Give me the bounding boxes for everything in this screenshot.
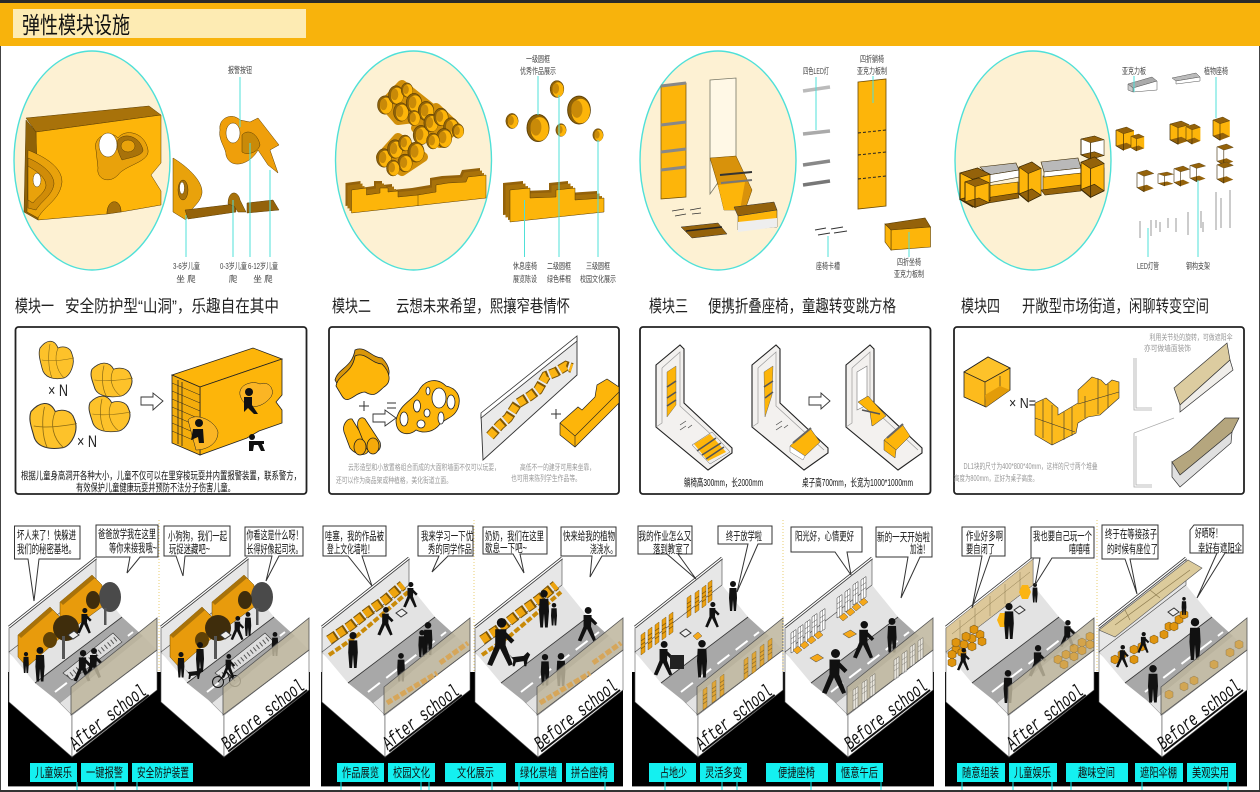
label: Before school: Before school: [840, 676, 932, 755]
panel: module four explanation: [954, 327, 1244, 494]
panel: module two exploded illustration: [336, 51, 616, 284]
tags: module three: [649, 763, 883, 782]
text block: 也可用来陈列学生作品等。: [511, 473, 581, 483]
cyan leader lines: [186, 77, 270, 257]
panel: module one explanation: [16, 327, 306, 494]
callout: 阳光好: [791, 527, 862, 575]
icon: separated cubes: [1116, 117, 1233, 192]
callout: 奶奶: 歇息一下吧~: [485, 541, 527, 555]
arrow: [809, 393, 830, 409]
icon: separated bench: [503, 181, 604, 222]
text: times N equals: × N=: [1009, 395, 1036, 412]
header band: [0, 3, 1260, 46]
icon: separated rings: [506, 81, 603, 142]
labels: 四色LED灯: [803, 66, 829, 76]
icon: cloud piece: [335, 349, 389, 400]
cyan leader lines: [1134, 76, 1216, 257]
labels: age groups: 坐 爬: [253, 274, 273, 284]
icon: folded table and chair: [846, 345, 922, 470]
callout: 好晒呀: [1190, 525, 1243, 598]
tags: module four: [957, 763, 1236, 782]
icon: folding seat raised: [672, 78, 777, 238]
tags: module one: 安全防护装置: [137, 765, 189, 780]
labels: 二级圆框: [547, 261, 571, 271]
callout: 小狗狗: 玩捉迷藏吧~: [169, 542, 210, 556]
callout: 坏人来了: 我们的秘密基地。: [17, 542, 76, 556]
callout: 作业好多: 作业好多啊: [966, 529, 1003, 543]
callout: 终于放学: 终于放学啦: [726, 529, 762, 543]
callout: 我也要玩: 我也要自己玩一个: [1033, 530, 1092, 543]
tags: module two: 作品展览: [342, 765, 379, 780]
icon: module pieces times N: [30, 341, 133, 451]
labels: LED灯管: [1137, 261, 1159, 271]
callout: 我也要玩: [1031, 527, 1094, 585]
callout: 爸爸放学: 爸爸放学我在这里: [98, 527, 156, 541]
label: Before school: Before school: [530, 676, 622, 755]
heading: module three: [649, 297, 896, 316]
black ground: group two: [321, 672, 623, 786]
heading: module one: 模块一: [15, 297, 54, 316]
text block: 有效保护儿童健康玩耍并预防不法分子伤害儿童。: [76, 481, 235, 494]
labels: 休息座椅: [513, 261, 537, 271]
icon: cave wall block: [24, 106, 161, 220]
callout: 小狗狗: [164, 526, 230, 576]
icon: stepped bench wall: [346, 168, 486, 213]
labels: 三级圆框: [586, 261, 610, 271]
text block: 根据儿童身高洞开各种大小，儿童不仅可以在里穿梭玩耍并内置报警装置，联系警方，: [21, 469, 301, 482]
tags: module two: 绿化景墙: [520, 765, 557, 780]
icon: cylinders: [344, 418, 381, 455]
callout: 快来给植物: 浇浇水。: [590, 543, 617, 556]
callout: 终于有座位: [1102, 525, 1158, 594]
icon: assembled cave wall with children: [172, 348, 282, 455]
labels: age groups: 爬: [229, 274, 238, 284]
tags: module one: [30, 763, 193, 782]
labels: 展览陈设: [513, 274, 537, 284]
icon: LED bars: [803, 87, 830, 185]
callout: 奶奶: [483, 527, 547, 573]
callout: 作业落到教室: 落到教室了: [653, 542, 690, 556]
callout: 哇塞: 哇塞，我的作品被: [325, 529, 384, 543]
icon: plus: [359, 401, 369, 411]
labels: 钢构支架: [1186, 261, 1210, 271]
bottom gray lines under black ground: [8, 786, 1247, 788]
callout: 爸爸放学: [96, 525, 158, 573]
text block: 桌子高700mm，长宽为1000*1000mm: [802, 476, 913, 489]
title: 弹性模块设施: [22, 12, 130, 38]
top edge bar: [0, 0, 1260, 3]
panel: module three exploded illustration: [640, 51, 930, 279]
icon: cube unit: [964, 357, 1010, 407]
labels: age groups: 0-3岁儿童: [220, 261, 247, 271]
panel: module one exploded illustration: [14, 51, 279, 284]
callout: 奶奶: 奶奶，我们在这里: [485, 529, 544, 543]
text block: 躺椅高300mm，长2000mm: [684, 476, 763, 489]
labels: 四折躺椅: [860, 54, 884, 64]
label: Before school: Before school: [217, 676, 309, 755]
label: After school: After school: [65, 681, 151, 755]
text block: rotating joint: [1144, 332, 1232, 353]
tags: module three: 惬意午后: [841, 765, 878, 780]
panel: module three explanation: [640, 327, 930, 494]
tags: module four: 遮阳伞棚: [1140, 765, 1177, 780]
arrow: [141, 393, 163, 410]
tags: module four: 美观实用: [1192, 765, 1229, 780]
icon: ring clusters: [377, 83, 464, 176]
labels: 校园文化展示: [580, 274, 616, 284]
icon: table half folded: [752, 345, 828, 470]
heading: module two: [332, 296, 570, 316]
label: After school: After school: [1002, 681, 1088, 755]
cyan leader lines: [524, 76, 598, 257]
tags: module four: 儿童娱乐: [1014, 765, 1051, 780]
icon: market stall frames: [960, 136, 1104, 207]
tags: module two: [337, 763, 614, 782]
icon: steel posts and LED tubes: [1140, 190, 1230, 238]
scene: module one before school: [161, 558, 309, 757]
tags: module two: 校园文化: [393, 765, 430, 780]
scene: module two after school: [322, 558, 470, 757]
black ground: group three: [632, 672, 934, 786]
text block: 高低不一的建牙可用来坐靠，: [520, 462, 595, 472]
callout: 你看这是什么: 你看这是什么呀！: [246, 528, 302, 542]
callout: 作业落到教室: [638, 526, 696, 579]
callout: 哇塞: 登上文化墙啦！: [327, 542, 374, 556]
tags: module three: 灵活多变: [705, 765, 742, 780]
heading: module three: 模块三: [649, 297, 688, 316]
labels: 亚克力板: [1122, 66, 1146, 76]
text block: 还可以作为商品架或种植格，美化街道立面。: [336, 475, 452, 485]
icon: four fold acrylic panel: [858, 79, 886, 209]
labels: age groups: 3-6岁儿童: [173, 261, 200, 271]
heading: module four: 开敞型市场街道，闲聊转变空间: [1022, 297, 1209, 316]
callout: 阳光好: 阳光好，心情更好: [795, 529, 854, 543]
label: After school: After school: [378, 681, 464, 755]
callout: 你看这是什么: [245, 527, 303, 581]
labels: 座椅卡槽: [816, 261, 840, 271]
scene: module one after school: [9, 558, 157, 757]
icon: acrylic parts: [1128, 73, 1200, 92]
tags: module four: 随意组装: [962, 765, 999, 780]
callout: 你看这是什么: 长得好像起司块。: [246, 542, 302, 556]
icon: module pieces times N: × N: [77, 432, 97, 451]
callout: 快来给植物: 快来给我的植物: [563, 529, 615, 543]
labels: [513, 54, 616, 284]
heading: module four: [961, 297, 1209, 316]
text block: dimensions: DL1块的尺寸为400*800*40mm，这样的尺寸两个堆叠: [964, 461, 1098, 471]
icon: folding seat unfolded: [661, 83, 686, 199]
callout: 终于放学: [718, 526, 772, 592]
callout: 作业好多: [962, 527, 1005, 608]
callout: 快来给植物: [561, 527, 617, 577]
panel: module four exploded illustration: [955, 51, 1233, 271]
callout: 坏人来了: 坏人来了！快躲进: [17, 528, 76, 542]
icon: wall elevations: [1134, 358, 1174, 487]
dotted dividers between scene pairs: [159, 520, 1097, 672]
black ground: group four: [945, 672, 1247, 786]
scene: module two before school: [475, 558, 623, 757]
callout: 新的一天: [876, 527, 932, 598]
callout: 小狗狗: 小狗狗，我们一起: [168, 529, 227, 543]
callout: 新的一天: 加油！: [910, 542, 929, 556]
icon: cube cluster: [1035, 377, 1119, 445]
text block: dimensions: 高度为800mm，正好为桌子高度。: [954, 473, 1038, 483]
labels: 亚克力板制: [857, 66, 887, 76]
tags: module two: 拼合座椅: [571, 765, 608, 780]
icon: stepped bench: [560, 379, 619, 447]
icon: lounge chair laid flat: [656, 345, 732, 470]
equals: [387, 403, 396, 408]
labels: [1122, 66, 1228, 271]
text block: rotating joint: 亦可做墙面装饰: [1144, 343, 1191, 353]
labels: 优秀作品展示: [520, 66, 556, 76]
callout: 作业落到教室: 我的作业怎么又: [638, 529, 692, 543]
heading: module three: 便携折叠座椅，童趣转变跳方格: [708, 297, 896, 316]
title: [13, 9, 306, 38]
scene: module four after school: [946, 558, 1094, 757]
callout: 我也要玩: 嘻嘻嘻: [1069, 543, 1090, 556]
icon: seat slots: [815, 227, 847, 235]
tags: module one: 一键报警: [86, 765, 123, 780]
right page edge: [1259, 46, 1260, 792]
callout: 我来学习: 我来学习一下优: [421, 529, 473, 543]
labels: 植物座椅: [1204, 66, 1228, 76]
scene: module four before school: [1099, 558, 1247, 757]
callout: 作业好多: 要自闭了: [966, 543, 995, 556]
icon: display wall: [481, 336, 577, 460]
labels: age groups: [173, 261, 278, 284]
callout: 终于有座位: 的时候有座位了: [1107, 542, 1158, 556]
labels: age groups: 6-12岁儿童: [248, 261, 278, 271]
label: alarm button: 报警按钮: [228, 65, 252, 75]
icon: folding wall bottom: [1172, 418, 1239, 487]
tags: module three: 占地少: [660, 765, 687, 780]
labels: age groups: 坐 爬: [176, 274, 196, 284]
cyan leader lines: [816, 76, 909, 257]
callout: 哇塞: [323, 526, 386, 586]
icon: folding wall top: [1174, 343, 1233, 412]
icon: perforated cloud: [396, 381, 459, 434]
callout: 我来学习: [418, 526, 473, 572]
tags: module three: 便捷座椅: [778, 765, 815, 780]
tags: module four: 趣味空间: [1078, 765, 1115, 780]
callout: 我来学习: 秀的同学作品: [428, 542, 472, 556]
black ground: group one: [8, 672, 310, 786]
bottom dark bar: [0, 790, 1260, 792]
label: After school: After school: [691, 681, 777, 755]
scene: module three before school: [785, 558, 933, 757]
text block: [336, 462, 595, 485]
callout: 爸爸放学: 等你来接我哦~: [109, 541, 157, 555]
tags: module one: 儿童娱乐: [35, 765, 72, 780]
callout: 新的一天: 新的一天开始啦: [877, 530, 930, 544]
labels: 一级圆框: [526, 54, 550, 64]
labels: 四折坐椅: [897, 257, 921, 267]
text block: rotating joint: 利用关节处的旋转，可做遮阳伞: [1150, 332, 1232, 342]
labels: 亚克力板制: [894, 269, 924, 279]
left page edge: [0, 46, 1, 792]
cyan connector lines to bottom: [77, 782, 1228, 790]
icon: four fold seat: [885, 218, 930, 250]
labels: [803, 54, 924, 279]
panel: module two explanation: [329, 327, 619, 494]
text block: [684, 476, 913, 489]
callout: 终于有座位: 终于在等接孩子: [1105, 527, 1157, 541]
tags: module two: 文化展示: [457, 765, 494, 780]
callout: 好晒呀: 好晒呀！: [1195, 526, 1222, 540]
arrow: [373, 410, 396, 426]
text block: [21, 469, 301, 494]
icon: module pieces times N: × N: [48, 381, 68, 400]
text block: dimensions: [954, 461, 1098, 483]
heading: module two: 云想未来希望，熙攘窄巷情怀: [396, 296, 570, 316]
text block: 云形造型和小放置格组合而成的大面积墙面不仅可以玩耍，: [348, 462, 500, 472]
heading: module four: 模块四: [961, 297, 1000, 316]
callout: 坏人来了: [14, 526, 80, 601]
icon: plus: [551, 409, 561, 419]
scene: module three after school: [635, 558, 783, 757]
icon: exploded cave pieces: [173, 116, 279, 220]
labels: 绿色棒棍: [547, 274, 571, 284]
heading: module two: 模块二: [332, 297, 371, 316]
heading: module one: 安全防护型“山洞”，乐趣自在其中: [65, 297, 279, 316]
